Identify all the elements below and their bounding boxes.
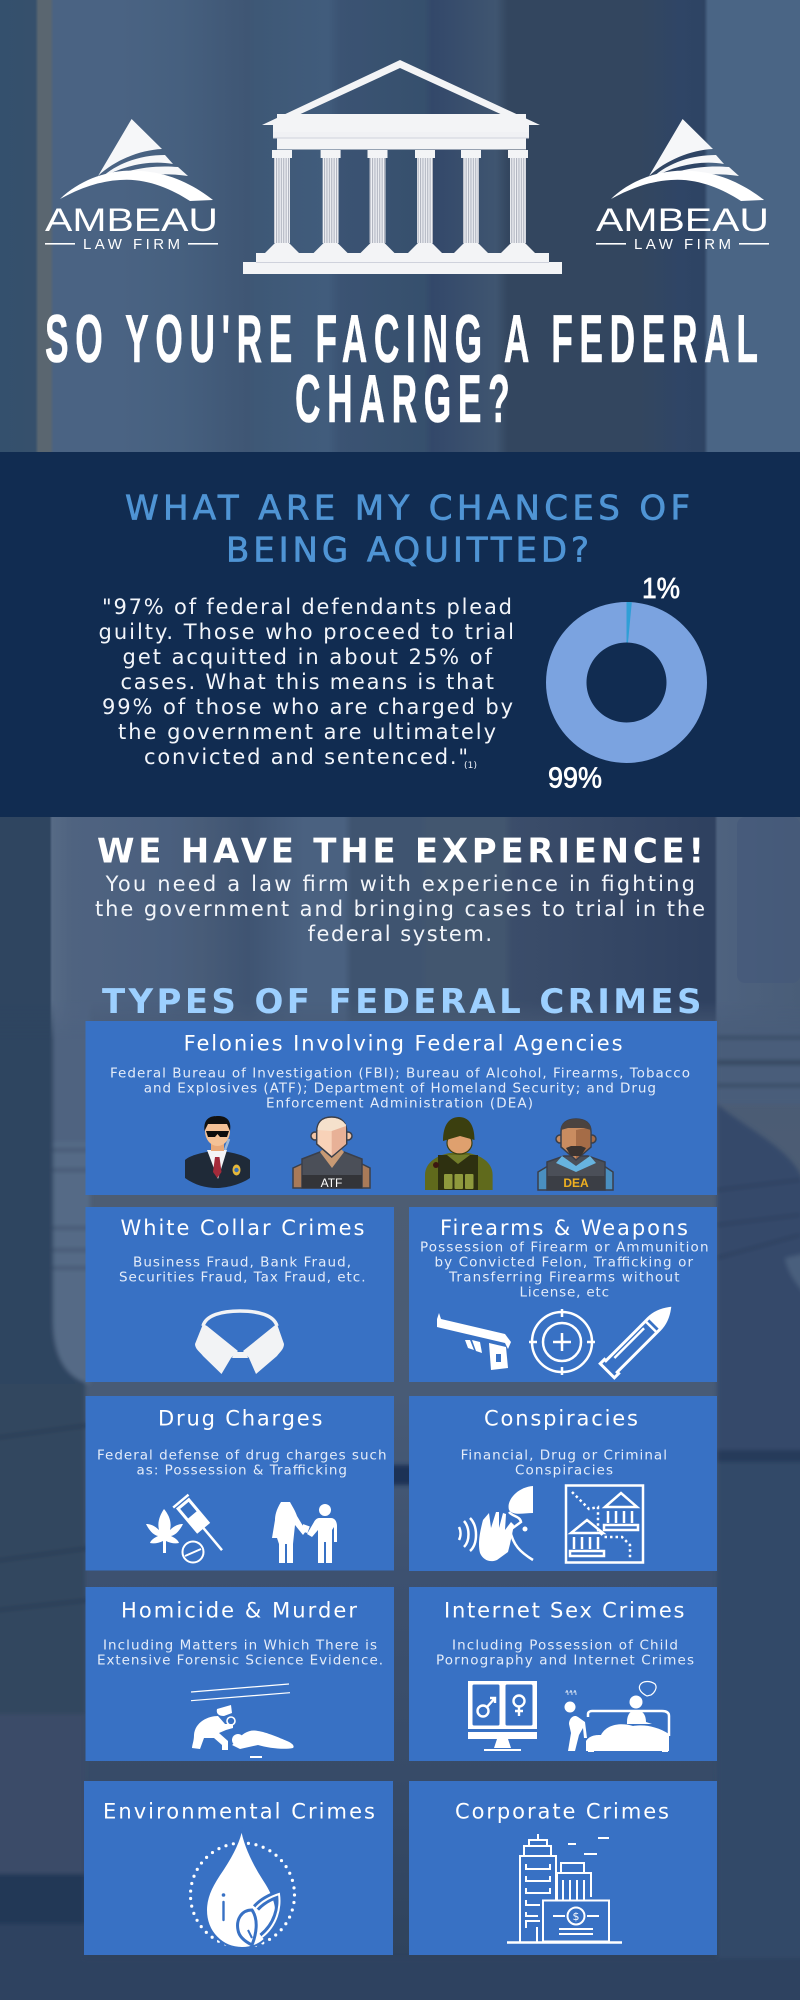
text block: agencies list: and Explosives (ATF); Department of Homeland Security; and Drug — [144, 1081, 656, 1097]
icon: shirt collar — [195, 1311, 284, 1374]
panel: internet sex crimes: Including Possession of Child — [452, 1637, 678, 1653]
icon: ATF agent — [293, 1117, 370, 1190]
text block: conviction statistic quote — [98, 595, 514, 771]
donut chart: 99 percent convicted, 1 percent acquitted: 99% — [548, 762, 602, 794]
panel: drug charges: Federal defense of drug charges such — [97, 1447, 386, 1463]
panel: environmental crimes — [84, 1781, 393, 1955]
logo: Ambeau Law Firm right: LAW FIRM — [634, 236, 731, 253]
icon: office buildings with dollar sign — [507, 1834, 622, 1942]
background: header columns — [0, 0, 800, 452]
heading: acquittal chances: WHAT ARE MY CHANCES OF — [125, 488, 690, 528]
panel: drug charges: Drug Charges — [158, 1407, 322, 1431]
text block: agencies list: Enforcement Administration (DEA) — [266, 1096, 533, 1112]
panel: firearms and weapons: Firearms & Weapons — [440, 1216, 688, 1240]
icon: DEA agent — [538, 1119, 613, 1190]
logo: Ambeau Law Firm right — [596, 119, 769, 253]
icon: detective inspecting body — [191, 1684, 294, 1758]
title — [45, 302, 758, 437]
icon: water drop with leaves — [190, 1828, 294, 1948]
logo: Ambeau Law Firm left: AMBEAU — [45, 202, 218, 238]
logo: Ambeau Law Firm right: AMBEAU — [596, 202, 769, 238]
panel: white collar crimes: Securities Fraud, Tax Fraud, etc. — [119, 1270, 366, 1286]
heading: we have the experience: WE HAVE THE EXPERIENCE! — [97, 832, 704, 872]
panel: white collar crimes — [86, 1207, 394, 1382]
icon: DEA agent: DEA — [563, 1176, 589, 1190]
title: SO YOU'RE FACING A FEDERAL — [45, 302, 758, 377]
logo: Ambeau Law Firm left — [45, 119, 218, 253]
panel: drug charges: as: Possession & Trafficking — [136, 1462, 347, 1478]
icon: cannabis leaf, syringe and pill — [146, 1495, 230, 1562]
panel: white collar crimes: Business Fraud, Bank Fraud, — [133, 1255, 351, 1271]
icon: monitor with gender symbols — [468, 1681, 537, 1751]
text block: conviction statistic quote: (1) — [464, 761, 477, 771]
panel: internet sex crimes: Internet Sex Crimes — [444, 1599, 684, 1623]
panel: conspiracies: Conspiracies — [515, 1462, 613, 1478]
icon: ATF agent: ATF — [321, 1176, 342, 1190]
panel: felonies involving federal agencies: Felonies Involving Federal Agencies — [184, 1032, 623, 1056]
heading: acquittal chances: BEING AQUITTED? — [226, 531, 589, 571]
donut chart: 99 percent convicted, 1 percent acquitted: 1% — [642, 573, 680, 605]
panel: firearms and weapons: License, etc — [520, 1285, 609, 1301]
icon: pistol — [437, 1313, 511, 1370]
text block: conviction statistic quote: cases. What this means is that — [120, 670, 494, 694]
text block: conviction statistic quote: get acquitted in about 25% of — [122, 645, 493, 669]
icon: whisper into ear — [459, 1486, 533, 1561]
panel: internet sex crimes — [409, 1587, 717, 1761]
icon: bullet — [600, 1301, 677, 1378]
panel: conspiracies: Conspiracies — [484, 1407, 638, 1431]
text block: experience description: You need a law firm with experience in fighting — [105, 872, 695, 896]
panel: conspiracies — [409, 1396, 717, 1571]
text block: experience description: the government and bringing cases to trial in the — [95, 897, 705, 921]
panel: firearms and weapons: Transferring Firearms without — [448, 1270, 680, 1286]
panel: homicide and murder: Including Matters in Which There is — [103, 1637, 377, 1653]
title: CHARGE? — [295, 362, 510, 437]
text block: experience description: federal system. — [308, 922, 492, 946]
panel: homicide and murder: Homicide & Murder — [121, 1599, 357, 1623]
panel: white collar crimes: White Collar Crimes — [120, 1216, 364, 1240]
icon: couple with bed — [564, 1682, 669, 1752]
icon: map with two banks — [566, 1486, 643, 1562]
panel: homicide and murder: Extensive Forensic Science Evidence. — [97, 1652, 383, 1668]
icon: office buildings with dollar sign: $ — [572, 1910, 580, 1923]
heading: acquittal chances — [125, 488, 690, 571]
text block: agencies list — [110, 1066, 690, 1112]
icon: target crosshair — [529, 1309, 595, 1375]
panel: firearms and weapons: Possession of Firearm or Ammunition — [420, 1240, 708, 1256]
icon: courthouse with columns — [243, 60, 562, 274]
text block: agencies list: Federal Bureau of Investigation (FBI); Bureau of Alcohol, Firearms, Tobacco — [110, 1066, 690, 1082]
text block: conviction statistic quote: 99% of those who are charged by — [102, 695, 513, 719]
text block: conviction statistic quote: guilty. Those who proceed to trial — [98, 620, 514, 644]
text block: conviction statistic quote: "97% of federal defendants plead — [102, 595, 512, 619]
text block: conviction statistic quote: convicted and sentenced." — [144, 745, 468, 769]
panel: firearms and weapons: by Convicted Felon, Trafficking or — [434, 1255, 693, 1271]
panel: acquittal chances — [0, 452, 800, 817]
panel: corporate crimes: Corporate Crimes — [455, 1799, 669, 1823]
donut chart: 99 percent convicted, 1 percent acquitted — [546, 573, 707, 794]
icon: FBI agent — [185, 1116, 250, 1188]
heading: types of federal crimes: TYPES OF FEDERAL CRIMES — [102, 982, 702, 1022]
icon: drug deal between two people — [272, 1502, 337, 1563]
background: lower columns and plinths — [0, 817, 800, 2000]
icon: armed soldier — [425, 1117, 493, 1190]
panel: felonies involving federal agencies — [86, 1021, 717, 1195]
panel: firearms and weapons — [409, 1207, 717, 1382]
logo: Ambeau Law Firm left: LAW FIRM — [83, 236, 180, 253]
panel: conspiracies: Financial, Drug or Criminal — [461, 1447, 667, 1463]
text block: conviction statistic quote: the government are ultimately — [118, 720, 496, 744]
panel: corporate crimes — [409, 1781, 717, 1955]
panel: internet sex crimes: Pornography and Internet Crimes — [436, 1652, 694, 1668]
panel: homicide and murder — [86, 1587, 394, 1761]
panel: drug charges — [86, 1396, 394, 1570]
text block: experience description — [95, 872, 705, 946]
panel: environmental crimes: Environmental Crimes — [103, 1799, 375, 1823]
